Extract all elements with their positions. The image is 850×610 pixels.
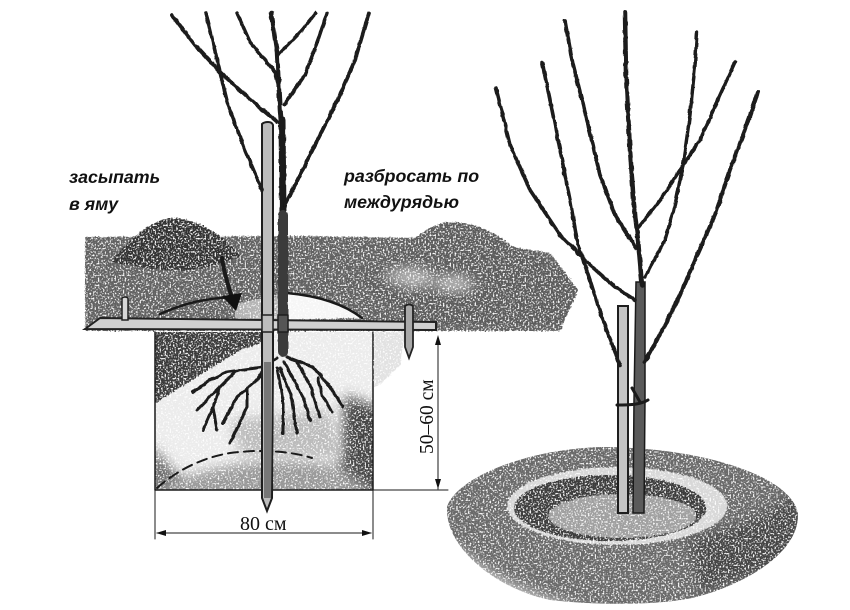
left planting diagram bbox=[85, 13, 578, 539]
dimension: depth 50-60 cm: 50–60 см bbox=[417, 379, 438, 454]
pile of soil: spread between rows bbox=[357, 222, 578, 325]
label: scatter between rows: разбросать по bbox=[343, 166, 479, 186]
dimension: depth 50-60 cm bbox=[373, 335, 448, 490]
dimension: width 80 cm bbox=[155, 490, 373, 539]
label: fill the hole: в яму bbox=[69, 194, 119, 214]
mound with watering ring bbox=[447, 447, 798, 604]
right planted tree bbox=[440, 12, 805, 610]
light scatter right of pit bbox=[374, 332, 405, 388]
trunk bbox=[633, 282, 645, 513]
dimension: width 80 cm: 80 см bbox=[240, 513, 287, 535]
left tree trunk and branches bbox=[172, 13, 369, 352]
arrow into pit bbox=[222, 258, 242, 311]
tie bbox=[617, 388, 648, 405]
stake and trunk over plank bbox=[262, 315, 288, 332]
planks and pegs bbox=[85, 297, 436, 358]
roots bbox=[193, 357, 343, 443]
stake bbox=[262, 122, 273, 511]
hole rim bbox=[160, 293, 362, 318]
branches bbox=[496, 12, 758, 365]
planting pit bbox=[154, 331, 374, 491]
stake bbox=[618, 306, 628, 513]
label: scatter between rows: междурядью bbox=[344, 192, 459, 212]
pile of soil: fill the hole bbox=[110, 218, 240, 270]
ground band with soil texture bbox=[85, 236, 578, 331]
label: fill the hole: засыпать bbox=[69, 167, 160, 187]
